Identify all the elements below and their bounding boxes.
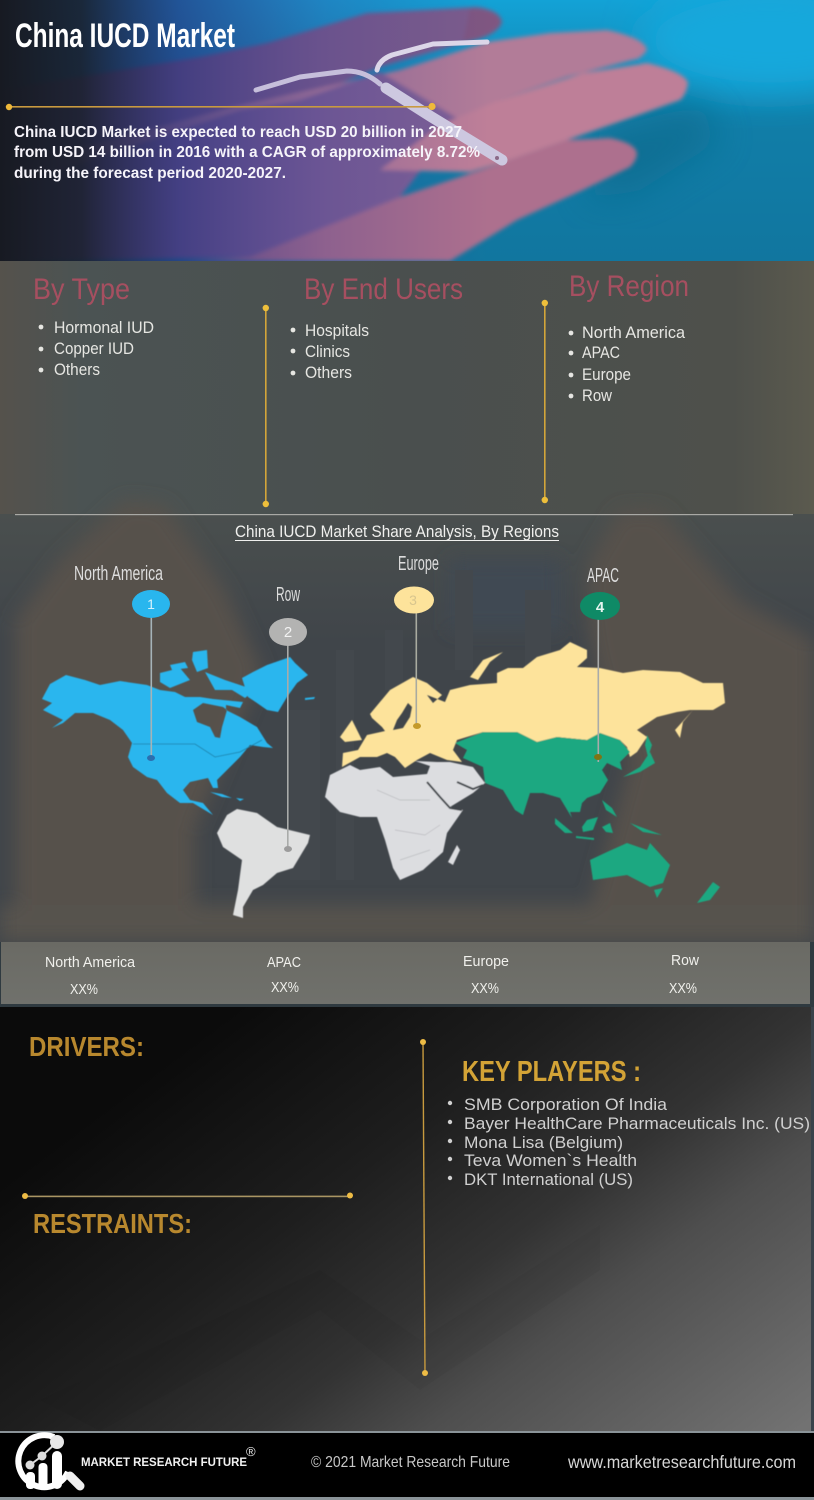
panel: share table — [0, 942, 814, 1007]
pin: apac: 4 — [596, 599, 605, 616]
column: by end users: Others — [305, 364, 352, 382]
brand name: MARKET RESEARCH FUTURE — [81, 1455, 247, 1469]
column: by region: APAC — [582, 344, 620, 362]
pin: north america: 1 — [147, 596, 155, 612]
panel: share table: XX% — [70, 981, 98, 998]
market summary text: China IUCD Market is expected to reach USD 20 billion in 2027 — [14, 124, 462, 141]
panel: share table: North America — [45, 954, 136, 971]
column: by type: By Type — [33, 273, 130, 306]
panel: drivers, restraints, key players — [0, 1007, 814, 1431]
panel: map section — [15, 514, 793, 918]
map heading: China IUCD Market Share Analysis, By Regions — [235, 523, 559, 541]
border: us and canada — [133, 740, 262, 757]
divider: drivers and restraints — [22, 1192, 353, 1199]
icon: IUD device — [256, 42, 502, 160]
column: by end users: Clinics — [305, 343, 350, 361]
heading: key players: KEY PLAYERS : — [462, 1056, 641, 1088]
label: row: Row — [276, 584, 300, 606]
pin: europe: 3 — [409, 592, 417, 608]
icon: market research future logo — [18, 1435, 80, 1490]
registered mark: ® — [246, 1444, 256, 1459]
key players list: Mona Lisa (Belgium) — [464, 1133, 623, 1152]
column: by end users — [291, 273, 463, 382]
column: by type: Others — [54, 361, 100, 379]
column: by type: Copper IUD — [54, 340, 134, 358]
pin: apac — [580, 592, 620, 762]
heading: drivers: DRIVERS: — [29, 1031, 144, 1062]
region: africa and middle east — [325, 761, 485, 880]
column: by region: North America — [582, 324, 686, 342]
column: by region: By Region — [569, 270, 689, 303]
column: by region: Europe — [582, 366, 631, 384]
key players list: Bayer HealthCare Pharmaceuticals Inc. (US) — [464, 1114, 810, 1133]
heading: restraints: RESTRAINTS: — [33, 1208, 192, 1239]
footer — [0, 1431, 814, 1500]
panel: share table: Europe — [463, 953, 509, 970]
market summary text: during the forecast period 2020-2027. — [14, 165, 286, 182]
hand photo — [0, 7, 688, 261]
vertical divider — [420, 1039, 428, 1376]
key players list: DKT International (US) — [464, 1170, 633, 1189]
column: by region: Row — [582, 387, 612, 405]
column: by region — [569, 270, 689, 405]
key players list: Teva Women`s Health — [464, 1151, 637, 1170]
label: europe: Europe — [398, 553, 439, 575]
pin: row — [269, 618, 307, 852]
panel: share table: XX% — [271, 979, 299, 996]
vertical divider 2 — [542, 300, 548, 503]
title: China IUCD Market — [15, 17, 235, 55]
world map — [42, 642, 725, 918]
key players list: SMB Corporation Of India — [464, 1095, 668, 1114]
pin: europe — [394, 586, 434, 729]
region: south america — [217, 809, 310, 918]
label: north america: North America — [74, 563, 164, 585]
region: europe and russia — [340, 642, 725, 768]
hero panel — [0, 0, 814, 261]
region: apac — [455, 732, 720, 903]
divider line with dots — [6, 103, 436, 110]
column: by type: Hormonal IUD — [54, 319, 154, 337]
label: apac: APAC — [587, 565, 619, 587]
column: by end users: By End Users — [304, 273, 463, 306]
column: by end users: Hospitals — [305, 322, 369, 340]
website: www.marketresearchfuture.com — [567, 1452, 796, 1472]
panel: share table: Row — [671, 952, 699, 969]
region: north america — [42, 650, 315, 815]
shared background: segmentation and map — [0, 261, 814, 942]
panel: segmentation — [33, 270, 689, 507]
panel: share table: XX% — [471, 980, 499, 997]
market summary text: from USD 14 billion in 2016 with a CAGR of approximately 8.72% — [14, 144, 480, 161]
panel: share table: APAC — [267, 954, 301, 971]
vertical divider 1 — [263, 305, 269, 507]
key players list — [448, 1095, 810, 1189]
market summary text — [14, 124, 480, 182]
pin: north america — [132, 590, 170, 761]
panel: share table: XX% — [669, 980, 697, 997]
copyright: © 2021 Market Research Future — [311, 1454, 510, 1471]
column: by type — [33, 273, 154, 379]
pin: row: 2 — [284, 624, 292, 641]
